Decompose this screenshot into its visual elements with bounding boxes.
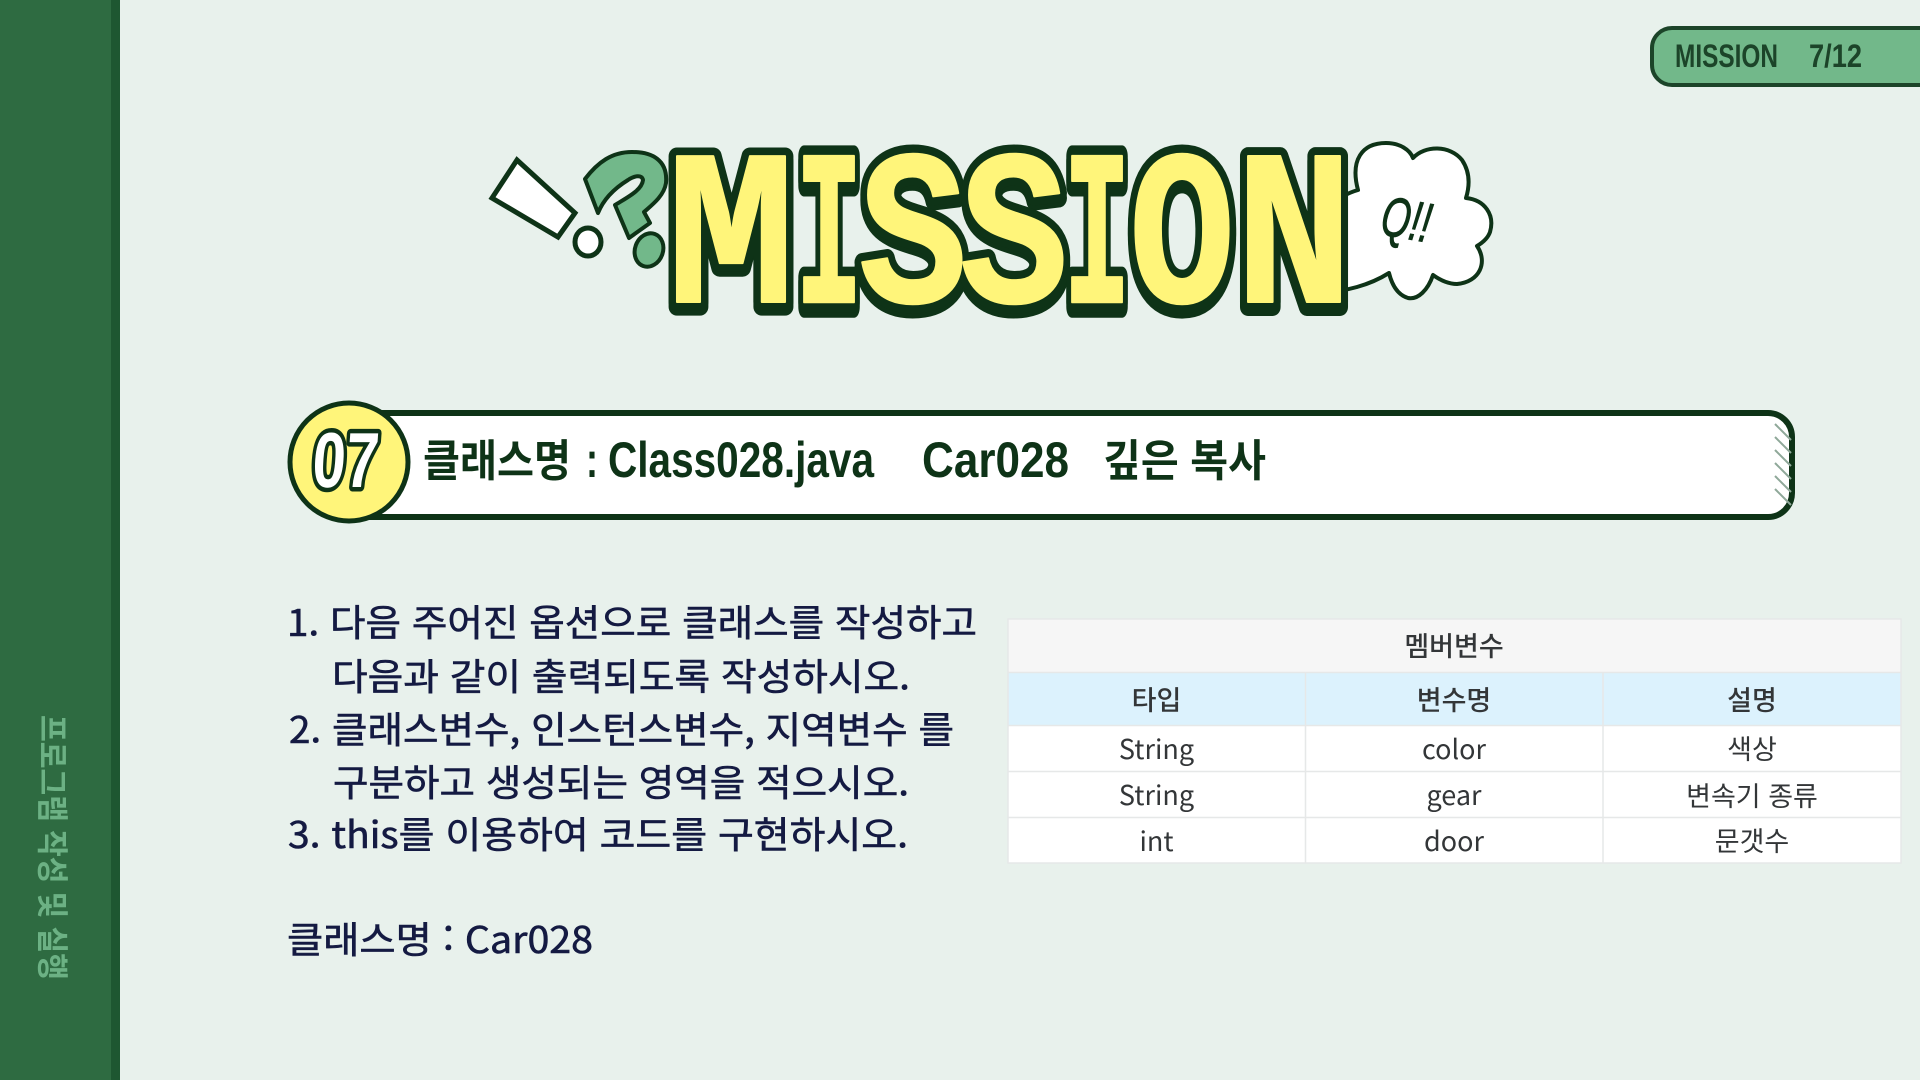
title: MISSION: S: [960, 118, 1068, 369]
table row: door: door: [1424, 820, 1484, 859]
table row: color: String: [1119, 728, 1194, 767]
mission instructions: 1. 다음 주어진 옵션으로 클래스를 작성하고: [287, 593, 977, 647]
bar hatching: [1775, 424, 1791, 505]
mission instructions: 3. this를 이용하여 코드를 구현하시오.: [288, 805, 908, 859]
table row: gear: 변속기 종류: [1686, 775, 1818, 814]
title: MISSION: O: [1129, 118, 1235, 369]
title: MISSION: O: [1129, 123, 1235, 374]
bar heading text: 깊은 복사: [1103, 425, 1266, 489]
table row: gear: String: [1119, 774, 1194, 813]
title: MISSION: M: [667, 118, 795, 369]
table row: door: int: [1139, 820, 1174, 859]
title: MISSION: I: [795, 123, 863, 374]
icon: question mark: [585, 152, 668, 271]
table: member variables: [1008, 619, 1901, 863]
table row: color: 색상: [1727, 728, 1777, 767]
title: MISSION: N: [1235, 118, 1353, 369]
icon: speech cloud: [1296, 143, 1491, 298]
title: MISSION: M: [667, 118, 795, 369]
title: MISSION: S: [859, 118, 967, 369]
table row: color: [1119, 728, 1777, 767]
table row: door: [1139, 820, 1789, 859]
panel: class name bar: [345, 413, 1792, 517]
title: MISSION: I: [1063, 123, 1131, 374]
sidebar vertical label: 프로그램 작성 및 실행: [31, 715, 77, 980]
class name note: 클래스명 : Car028: [287, 910, 593, 964]
table row: gear: gear: [1426, 774, 1482, 813]
table row: gear: [1119, 774, 1818, 814]
bar heading text: 클래스명: [423, 425, 571, 489]
bar heading text: [423, 425, 1266, 489]
bar heading text: Class028.java: [608, 432, 875, 488]
title: MISSION: [667, 118, 1353, 374]
title: MISSION: S: [960, 118, 1068, 369]
cloud text: Q!!: [1377, 185, 1436, 255]
mission instructions: 다음과 같이 출력되도록 작성하시오.: [332, 647, 910, 701]
title: MISSION: I: [1063, 118, 1131, 369]
progress pill: mission 7/12: [1652, 28, 1920, 85]
mission instructions: 2. 클래스변수, 인스턴스변수, 지역변수 를: [289, 700, 954, 754]
title: MISSION: O: [1129, 118, 1235, 369]
bar heading text: :: [586, 432, 598, 488]
table header row: 타입: [1132, 679, 1181, 718]
title: MISSION: S: [960, 123, 1068, 374]
progress pill: mission 7/12: 7/12: [1809, 38, 1862, 74]
title: MISSION: I: [1063, 118, 1131, 369]
sidebar: [0, 0, 120, 1080]
title: MISSION: I: [795, 118, 863, 369]
title: MISSION: N: [1235, 123, 1353, 374]
title: MISSION: M: [667, 123, 795, 374]
title: MISSION: S: [859, 118, 967, 369]
table row: door: 문갯수: [1715, 820, 1789, 859]
table row: color: color: [1422, 728, 1487, 767]
table header row: 설명: [1727, 679, 1777, 718]
progress pill: mission 7/12: MISSION: [1675, 38, 1778, 74]
badge: number 07: [290, 403, 408, 521]
table header row: [1132, 679, 1777, 718]
table title: 멤버변수: [1404, 625, 1504, 664]
title: MISSION: S: [859, 123, 967, 374]
bar heading text: Car028: [922, 432, 1069, 488]
icon: exclamation mark: [492, 160, 601, 256]
mission instructions: 구분하고 생성되는 영역을 적으시오.: [333, 753, 909, 807]
badge: number 07: 07: [310, 416, 382, 504]
title: MISSION: I: [795, 118, 863, 369]
table header row: 변수명: [1417, 679, 1491, 718]
title: MISSION: N: [1235, 118, 1353, 369]
mission instructions: [287, 593, 977, 964]
